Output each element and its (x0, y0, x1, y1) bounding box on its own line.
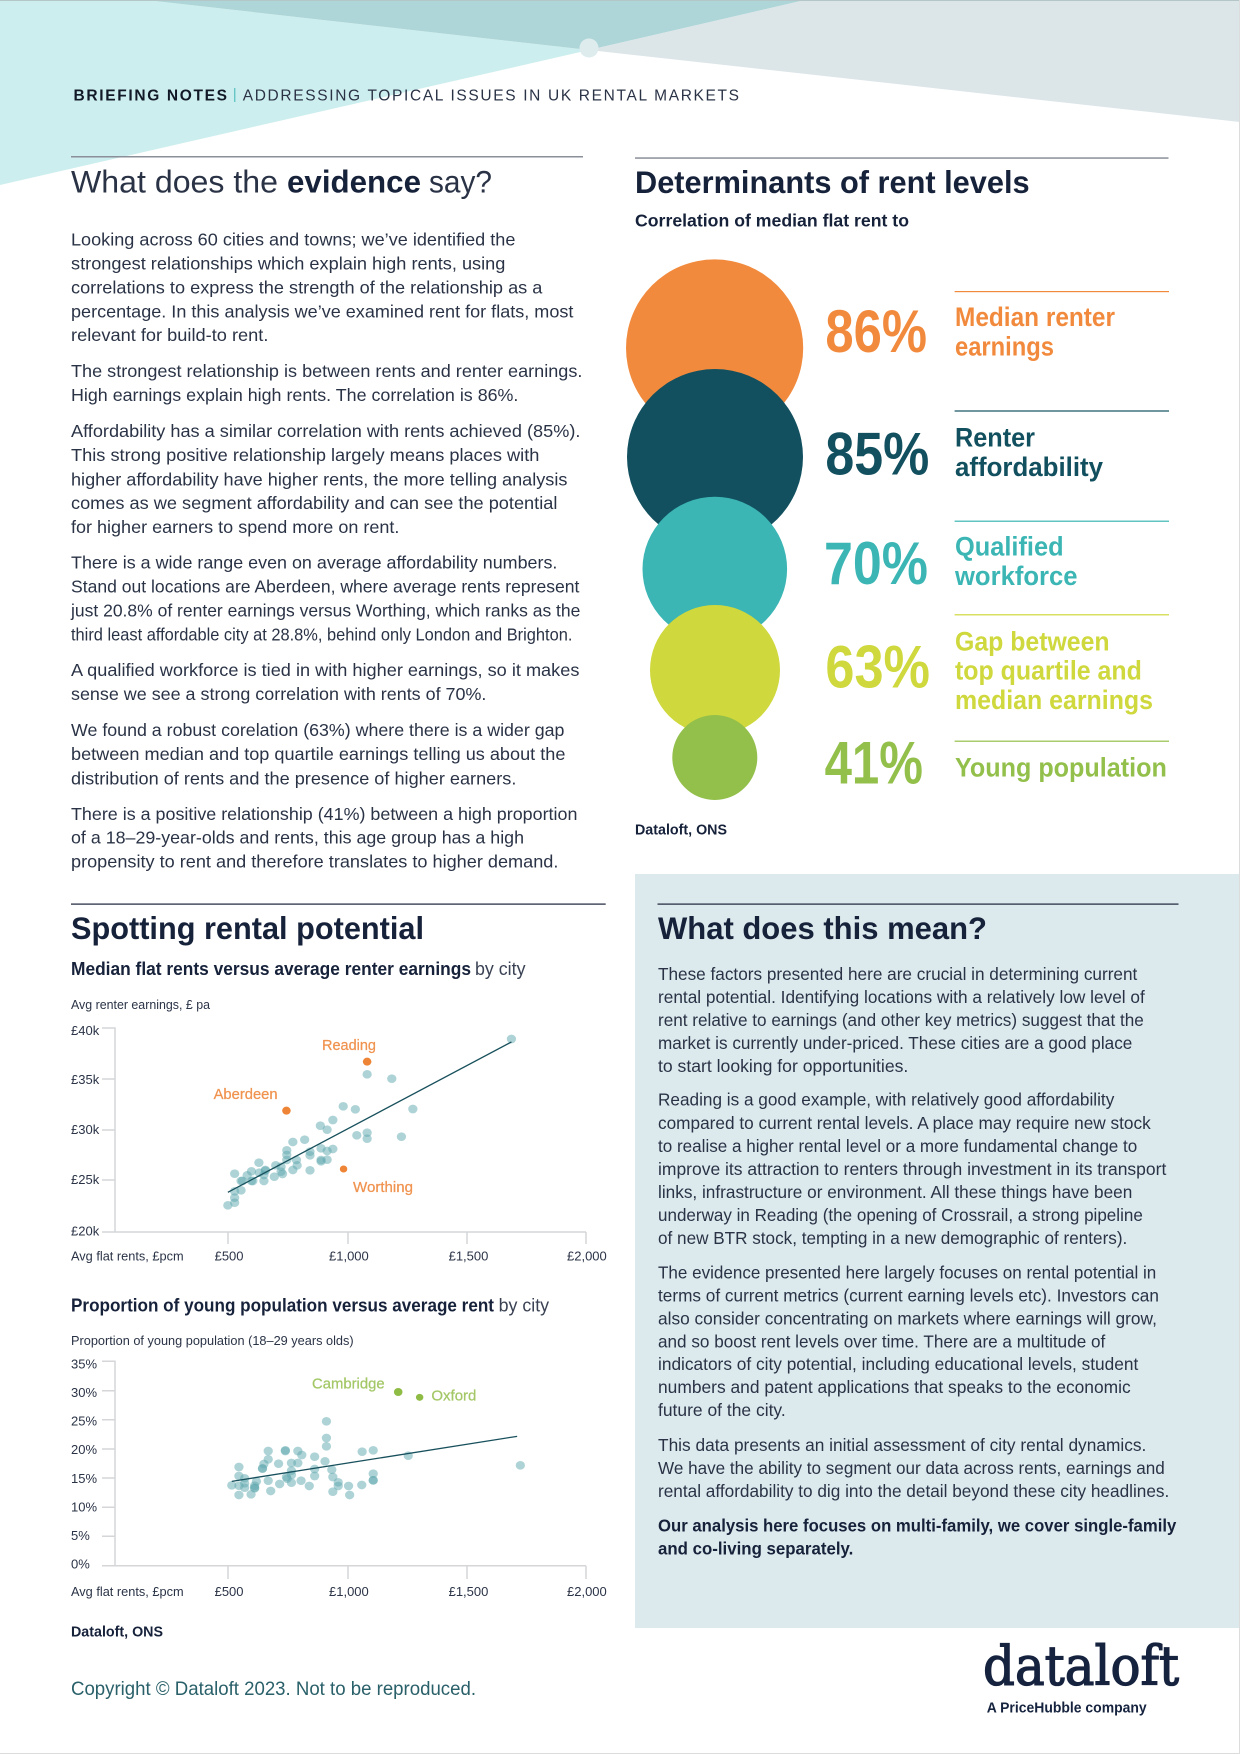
heading: What does the evidence say? (71, 164, 492, 200)
stat: 70% qualified workforce: workforce (954, 561, 1078, 591)
text block: meaning: and so boost rent levels over time. There are a multitude of (658, 1331, 1105, 1351)
text block: evidence: relevant for build-to rent. (71, 325, 268, 345)
heading: What does the evidence say?: What does the (71, 164, 278, 200)
chart title: median flat rents versus earnings: by city (475, 959, 526, 979)
text block: meaning: improve its attraction to renters through investment in its transport (658, 1159, 1166, 1179)
scatter chart: young population versus rent: 25% (71, 1414, 97, 1429)
text block: evidence: Affordability has a similar correlation with rents achieved (85%). (71, 421, 580, 441)
text block: closing statement: and co-living separately. (658, 1538, 853, 1558)
scatter chart: young population versus rent: £500 (215, 1584, 244, 1599)
text block: evidence: comes as we segment affordability and can see the potential (71, 493, 557, 513)
scatter chart: young population versus rent: £1,000 (329, 1584, 369, 1599)
stat: 85% renter affordability: Renter (955, 422, 1035, 452)
scatter chart: young population versus rent: 10% (71, 1499, 97, 1514)
header strapline: ADDRESSING TOPICAL ISSUES IN UK RENTAL MARKETS (243, 88, 739, 105)
scatter chart: rents versus earnings: Reading (322, 1037, 376, 1054)
text block: evidence (70, 230, 582, 871)
text block: closing statement (658, 1515, 1176, 1558)
scatter chart: young population versus rent: 15% (71, 1471, 97, 1486)
text block: meaning (658, 964, 1169, 1501)
text block: evidence: propensity to rent and therefore translates to higher demand. (71, 851, 558, 871)
text block: meaning: rent relative to earnings (and other key metrics) suggest that the (658, 1010, 1144, 1030)
text block: meaning: indicators of city potential, including educational levels, student (658, 1354, 1138, 1374)
scatter chart: rents versus earnings: £1,500 (449, 1248, 488, 1264)
text block: meaning: The evidence presented here largely focuses on rental potential in (658, 1263, 1156, 1283)
text block: evidence: between median and top quartile earnings telling us about the (71, 744, 565, 764)
text block: evidence: High earnings explain high rents. The correlation is 86%. (71, 385, 518, 405)
stat: 63% earnings gap: top quartile and (955, 656, 1142, 686)
text block: evidence: of a 18–29-year-olds and rents, this age group has a high (71, 827, 524, 847)
stat: 63% earnings gap: 63% (825, 633, 930, 700)
scatter chart: young population versus rent: £1,500 (449, 1584, 488, 1599)
stat: 86% median renter earnings: Median renter (955, 302, 1115, 332)
stat: 86% median renter earnings (825, 291, 1169, 365)
stat: 86% median renter earnings: 86% (825, 298, 927, 365)
scatter chart: rents versus earnings: £40k (71, 1023, 100, 1038)
stat: 63% earnings gap: median earnings (955, 685, 1153, 715)
text block: meaning: numbers and patent applications that speaks to the economic (658, 1377, 1131, 1397)
chart: overlapping correlation circles (626, 259, 803, 800)
scatter chart: rents versus earnings (71, 997, 607, 1264)
text block: evidence: There is a wide range even on average affordability numbers. (71, 552, 557, 572)
stat: 63% earnings gap (825, 614, 1169, 715)
scatter chart: rents versus earnings: £25k (71, 1172, 100, 1187)
text block: evidence: third least affordable city at 28.8%, behind only London and Brighton. (71, 624, 572, 644)
text block: meaning: market is currently under-priced. These cities are a good place (658, 1033, 1132, 1053)
text block: meaning: to start looking for opportunities. (658, 1056, 908, 1076)
stat: 85% renter affordability (825, 410, 1169, 488)
text block: evidence: percentage. In this analysis we’ve examined rent for flats, most (71, 301, 574, 321)
scatter chart: young population versus rent: Proportion of young population (18–29 years olds) (71, 1333, 354, 1348)
stat: 85% renter affordability: affordability (955, 452, 1103, 482)
text block: evidence: correlations to express the strength of the relationship as a (71, 277, 543, 297)
text block: evidence: distribution of rents and the presence of higher earners. (71, 768, 516, 788)
text block: meaning: This data presents an initial assessment of city rental dynamics. (658, 1435, 1146, 1455)
source: charts: Dataloft, ONS (71, 1625, 163, 1641)
chart title: median flat rents versus earnings: Median flat rents versus average renter earnings (71, 959, 471, 979)
logo: dataloft: dataloft (983, 1635, 1179, 1698)
subheading: correlation: Correlation of median flat rent to (635, 211, 909, 231)
heading: Determinants of rent levels: Determinants of rent levels (635, 164, 1030, 200)
text block: meaning: of new BTR stock, tempting in a new demographic of renters). (658, 1228, 1127, 1248)
scatter chart: young population versus rent: Oxford (431, 1388, 476, 1405)
stat: 63% earnings gap: Gap between (955, 627, 1110, 657)
text block: evidence: for higher earners to spend more on rent. (71, 517, 399, 537)
chart title: young population versus rent: by city (499, 1296, 549, 1316)
text block: evidence: Looking across 60 cities and towns; we’ve identified the (71, 230, 515, 250)
heading: Spotting rental potential: Spotting rental potential (71, 910, 424, 946)
heading: what does this mean: What does this mean? (658, 910, 987, 946)
stat: 70% qualified workforce: 70% (824, 530, 928, 597)
text block: meaning: rental potential. Identifying locations with a relatively low level of (658, 987, 1145, 1007)
heading: What does the evidence say?: evidence (287, 164, 421, 200)
stat: 70% qualified workforce: Qualified (955, 532, 1064, 562)
scatter chart: rents versus earnings: Avg flat rents, £pcm (71, 1248, 184, 1264)
text block: meaning: links, infrastructure or environment. All these things have been (658, 1182, 1132, 1202)
text block: meaning: These factors presented here are crucial in determining current (658, 964, 1137, 984)
text block: evidence: strongest relationships which explain high rents, using (71, 253, 505, 273)
text block: evidence: This strong positive relationship largely means places with (71, 445, 539, 465)
scatter chart: rents versus earnings: Avg renter earnings, £ pa (71, 997, 211, 1012)
text block: meaning: We have the ability to segment our data across rents, earnings and (658, 1458, 1165, 1478)
scatter chart: rents versus earnings: £20k (71, 1224, 100, 1239)
scatter chart: rents versus earnings: £35k (71, 1072, 100, 1087)
stat: 70% qualified workforce (824, 521, 1169, 597)
scatter chart: young population versus rent: 30% (71, 1385, 97, 1400)
text block: evidence: A qualified workforce is tied in with higher earnings, so it makes (71, 660, 580, 680)
text block: meaning: rental affordability to dig into the detail beyond these city headlines. (658, 1481, 1169, 1501)
chart title: young population versus rent: Proportion of young population versus average rent (71, 1296, 494, 1316)
text block: evidence: There is a positive relationship (41%) between a high proportion (71, 804, 577, 824)
text block: closing statement: Our analysis here focuses on multi-family, we cover single-family (658, 1515, 1176, 1535)
text block: meaning: terms of current metrics (current earning levels etc). Investors can (658, 1285, 1159, 1305)
text block: evidence: The strongest relationship is between rents and renter earnings. (71, 361, 582, 381)
logo: dataloft: A PriceHubble company (987, 1700, 1147, 1716)
heading: What does the evidence say?: say? (429, 164, 492, 200)
scatter chart: rents versus earnings: £30k (71, 1122, 100, 1137)
scatter chart: young population versus rent: Avg flat rents, £pcm (71, 1584, 184, 1599)
text block: meaning: underway in Reading (the opening of Crossrail, a strong pipeline (658, 1205, 1143, 1225)
text block: meaning: Reading is a good example, with relatively good affordability (658, 1090, 1114, 1110)
stat: 41% young population: Young population (955, 752, 1167, 782)
scatter chart: young population versus rent: £2,000 (567, 1584, 607, 1599)
panel: what does this mean (635, 874, 1239, 1628)
scatter chart: young population versus rent: 35% (71, 1357, 97, 1372)
scatter chart: rents versus earnings: Aberdeen (214, 1086, 278, 1103)
text block: evidence: Stand out locations are Aberdeen, where average rents represent (71, 576, 579, 596)
text block: meaning: future of the city. (658, 1400, 786, 1420)
scatter chart: rents versus earnings: Worthing (353, 1179, 413, 1196)
text block: evidence: We found a robust corelation (63%) where there is a wider gap (71, 720, 565, 740)
text block: evidence: just 20.8% of renter earnings versus Worthing, which ranks as the (70, 600, 580, 620)
stat: 86% median renter earnings: earnings (955, 332, 1054, 362)
scatter chart: young population versus rent: Cambridge (312, 1376, 385, 1393)
header strapline: BRIEFING NOTES (74, 88, 227, 105)
stat: 41% young population: 41% (825, 729, 923, 796)
scatter chart: young population versus rent: 20% (71, 1442, 97, 1457)
text block: meaning: to realise a higher rental level or a more fundamental change to (658, 1136, 1137, 1156)
scatter chart: rents versus earnings: £500 (215, 1248, 244, 1264)
copyright: Copyright © Dataloft 2023. Not to be reproduced. (71, 1678, 476, 1700)
scatter chart: young population versus rent: 5% (71, 1528, 90, 1543)
text block: meaning: also consider concentrating on markets where earnings will grow, (658, 1308, 1157, 1328)
stat: 85% renter affordability: 85% (825, 420, 929, 488)
text block: evidence: higher affordability have higher rents, the more telling analysis (71, 469, 568, 489)
stat: 41% young population (825, 729, 1169, 796)
text block: meaning: compared to current rental levels. A place may require new stock (658, 1113, 1151, 1133)
scatter chart: rents versus earnings: £1,000 (329, 1248, 369, 1264)
text block: evidence: sense we see a strong correlation with rents of 70%. (71, 684, 486, 704)
scatter chart: young population versus rent: 0% (71, 1556, 90, 1571)
scatter chart: rents versus earnings: £2,000 (567, 1248, 607, 1264)
source: determinants: Dataloft, ONS (635, 823, 727, 839)
header background shapes (0, 0, 1240, 185)
scatter chart: young population versus rent (71, 1333, 607, 1599)
